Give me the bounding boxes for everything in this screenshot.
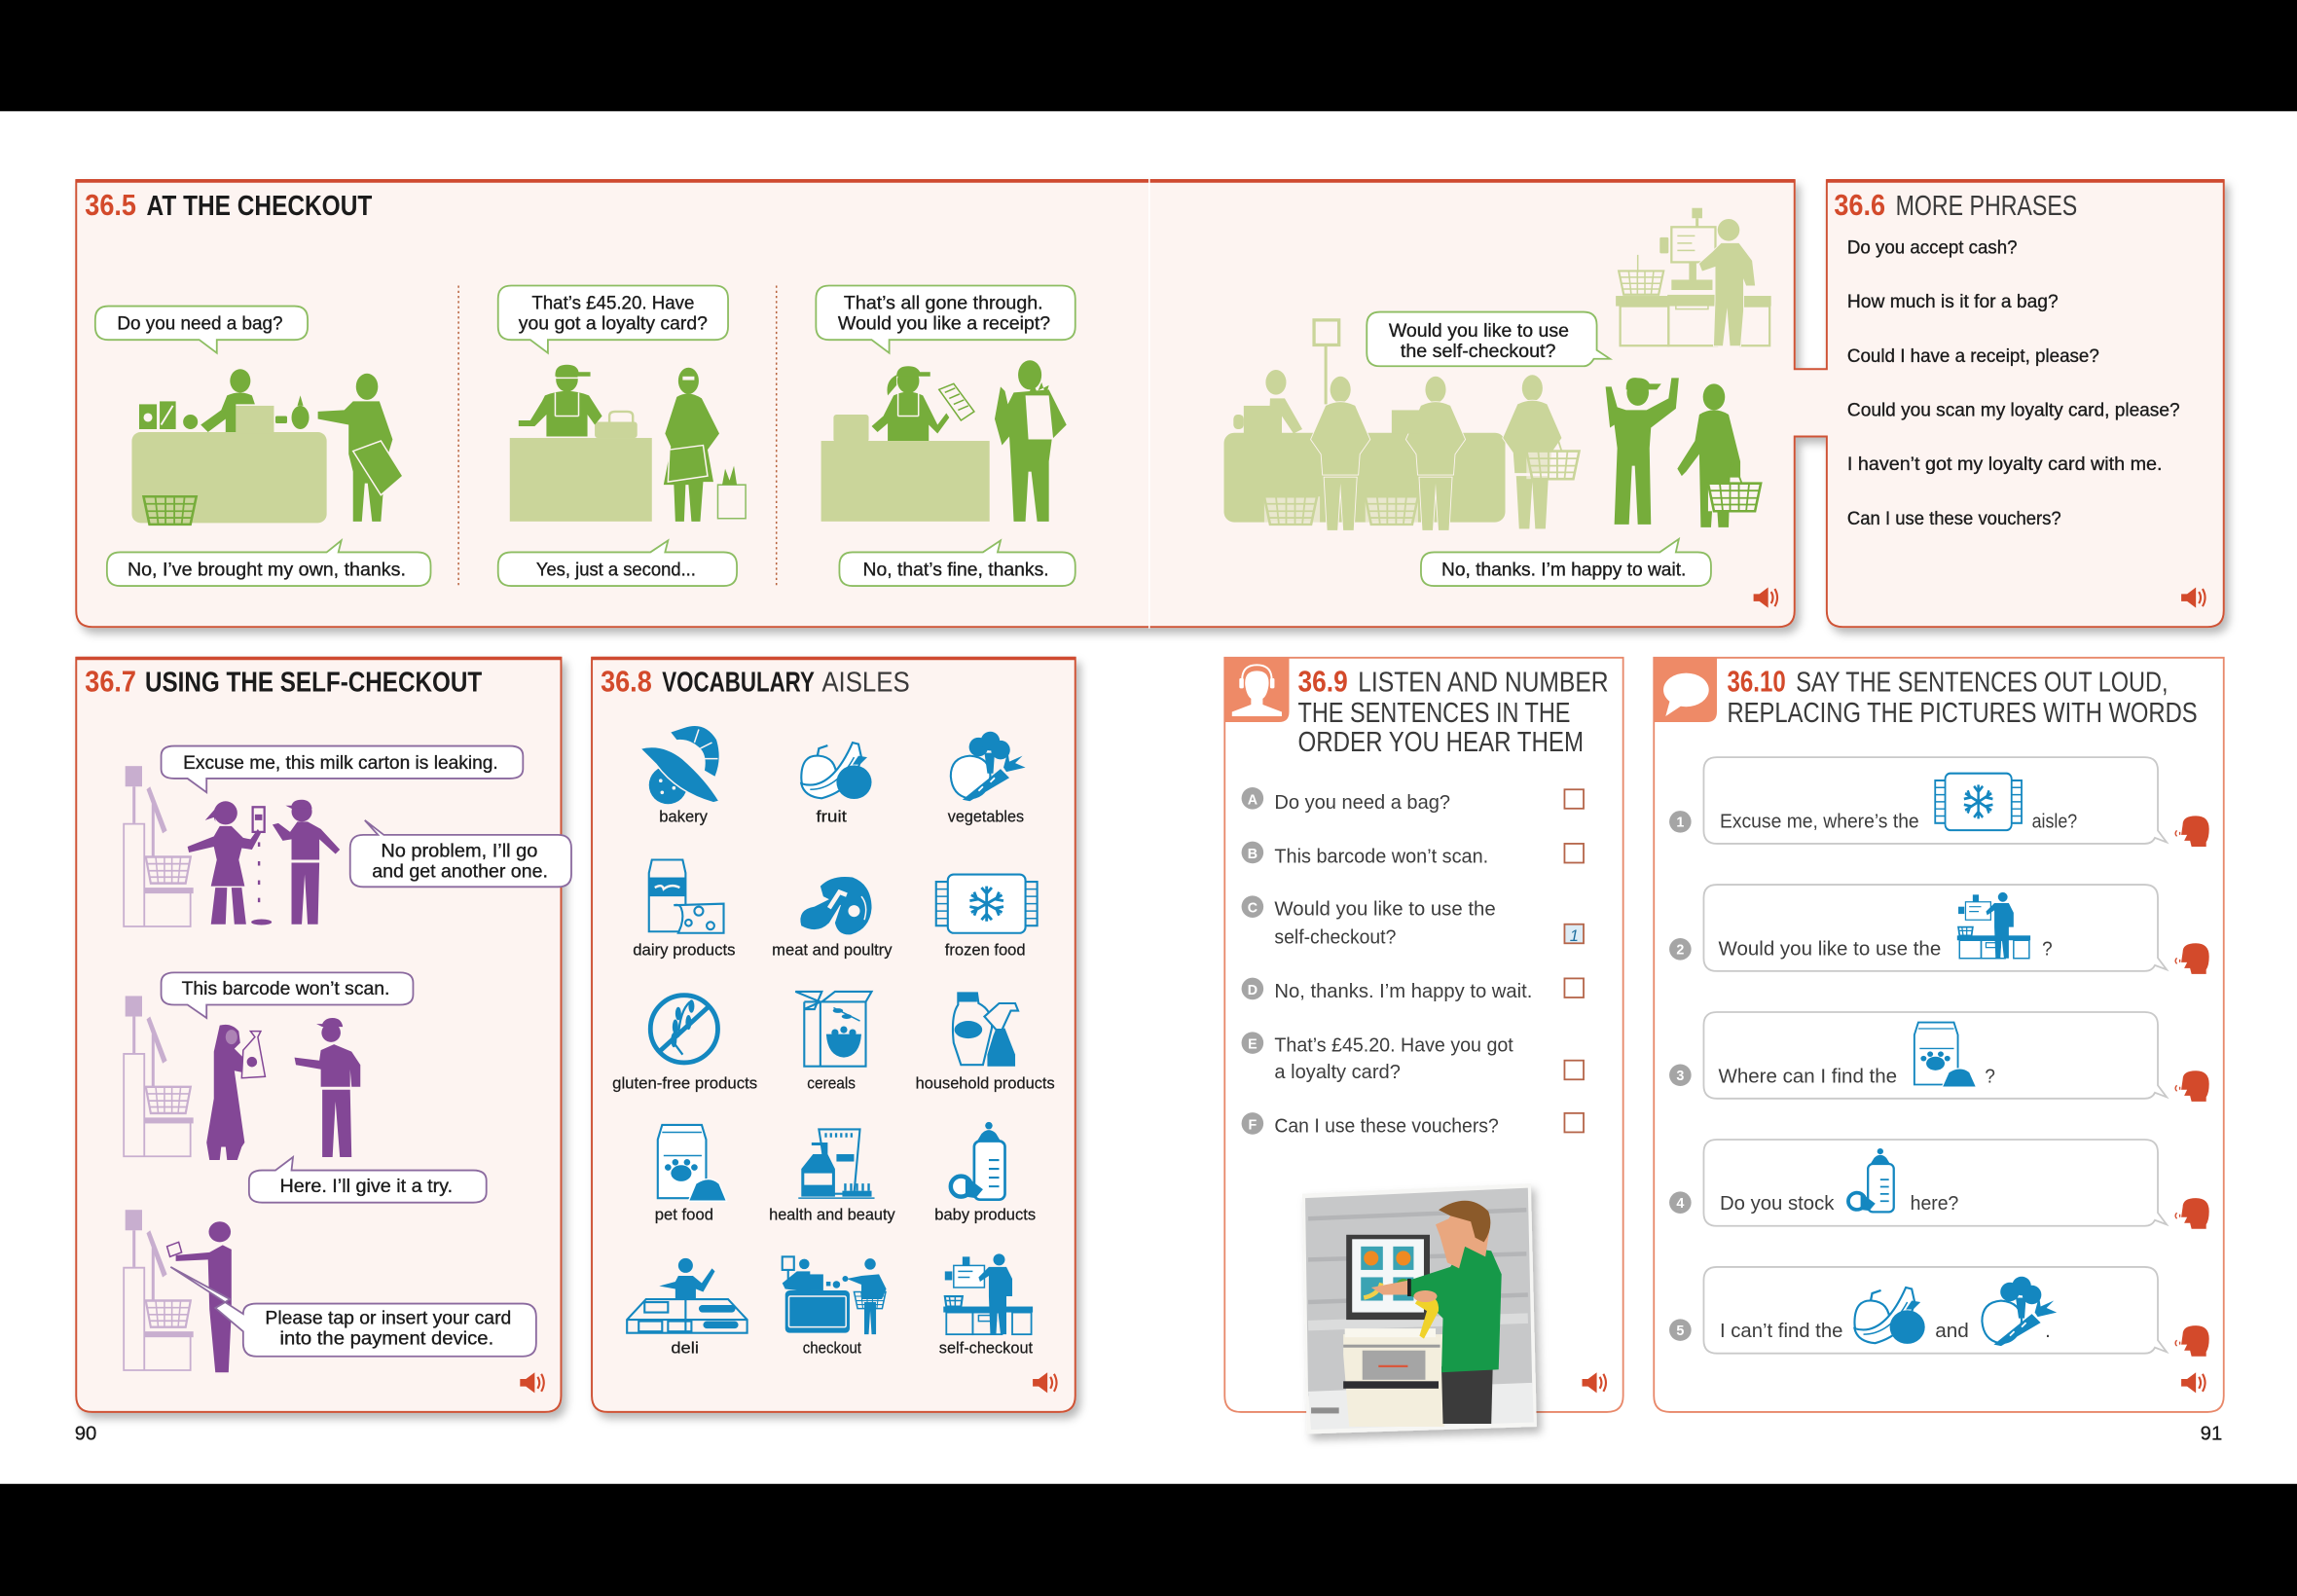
icon: audio speaker (520, 1372, 544, 1393)
top black band (0, 0, 2297, 111)
scene 2: loyalty card: That’s £45.20. Have (531, 293, 694, 314)
photo: man at self-checkout (1302, 1183, 1537, 1433)
phrase list (1847, 236, 2180, 529)
exercise row 2: 2 (1676, 943, 1684, 959)
scene 4: queue and self-checkout: No, thanks. I’m happy to wait. (1441, 560, 1686, 581)
heading 36.10: REPLACING THE PICTURES WITH WORDS (1728, 698, 2198, 729)
sentence list: No, thanks. I’m happy to wait. (1274, 981, 1532, 1002)
sentence list: That’s £45.20. Have you got (1274, 1035, 1513, 1057)
scene 4: queue and self-checkout: the self-checkout? (1401, 341, 1556, 362)
heading 36.6 (1834, 190, 2077, 222)
vocabulary: gluten-free products: gluten-free products (612, 1073, 757, 1092)
scene 3: receipt: That’s all gone through. (844, 293, 1043, 314)
vocabulary: deli (627, 1258, 747, 1358)
exercise row 4 (1669, 1140, 2209, 1229)
panel: 36.8 vocabulary aisles (592, 658, 1076, 1412)
sentence list: self-checkout? (1274, 926, 1396, 948)
phrase list: I haven’t got my loyalty card with me. (1847, 453, 2163, 475)
heading 36.8: VOCABULARY (662, 667, 815, 698)
scene 2: loyalty card: you got a loyalty card? (519, 313, 708, 335)
exercise row 4: here? (1911, 1193, 1958, 1215)
vocabulary: bakery (640, 726, 719, 825)
page number 91: 91 (2201, 1424, 2222, 1445)
panel: 36.6 more phrases (1834, 190, 2206, 608)
exercise row 1: 1 (1676, 816, 1684, 831)
sentence list: E (1248, 1037, 1258, 1053)
panel: 36.9 listen and number (1224, 658, 1623, 1433)
vocabulary: checkout: checkout (803, 1339, 861, 1358)
sentence list: D (1248, 983, 1258, 998)
vocabulary: self-checkout: self-checkout (939, 1339, 1033, 1358)
exercise row 4: Do you stock (1720, 1193, 1835, 1215)
scene 3: receipt: No, that’s fine, thanks. (863, 560, 1049, 581)
heading 36.9: THE SENTENCES IN THE (1298, 698, 1570, 729)
exercise row 1 (1669, 757, 2209, 847)
vocabulary: baby products (934, 1122, 1036, 1224)
vocabulary: dairy products: dairy products (633, 940, 736, 959)
heading 36.8: AISLES (821, 667, 910, 698)
icon: audio speaker (1033, 1372, 1057, 1393)
heading 36.5: AT THE CHECKOUT (147, 191, 373, 222)
page number 90: 90 (75, 1424, 96, 1445)
exercise row 3: ? (1985, 1066, 1995, 1087)
scene 3: receipt (816, 285, 1076, 586)
panel: 36.7 using the self-checkout (76, 658, 571, 1412)
scene: barcode won't scan (124, 972, 487, 1203)
vocabulary: cereals: cereals (807, 1073, 856, 1092)
exercise row 3: Where can I find the (1718, 1066, 1897, 1087)
phrase list: Can I use these vouchers? (1847, 508, 2061, 529)
heading 36.5: 36.5 (85, 190, 136, 222)
scene 2: loyalty card: Yes, just a second... (536, 560, 696, 581)
sentence list: C (1248, 901, 1258, 917)
exercise row 3 (1669, 1012, 2209, 1102)
heading 36.7: 36.7 (85, 666, 136, 698)
exercise row 1: Excuse me, where’s the (1720, 811, 1919, 832)
vocabulary: cereals (795, 992, 872, 1092)
phrase list: Could you scan my loyalty card, please? (1847, 399, 2180, 420)
vocabulary: gluten-free products (612, 996, 757, 1092)
vocabulary: meat and poultry (772, 877, 893, 959)
heading 36.10: 36.10 (1728, 666, 1786, 698)
sentence list: Would you like to use the (1274, 899, 1496, 921)
heading 36.6: MORE PHRASES (1896, 191, 2077, 222)
heading 36.10: SAY THE SENTENCES OUT LOUD, (1796, 667, 2169, 698)
icon: audio speaker (1583, 1372, 1606, 1393)
panel: 36.5 at the checkout (85, 190, 1777, 608)
heading 36.8 (601, 666, 910, 698)
exercise row 5: and (1935, 1321, 1969, 1342)
scene 1: do you need a bag: Do you need a bag? (117, 313, 283, 335)
sentence list: a loyalty card? (1274, 1062, 1401, 1083)
exercise row 5: I can’t find the (1720, 1321, 1842, 1342)
heading 36.8: 36.8 (601, 666, 652, 698)
sentence list: B (1248, 847, 1258, 862)
exercise row 3: 3 (1676, 1069, 1684, 1084)
divider (458, 285, 777, 586)
scene: leaking milk carton: and get another one. (372, 861, 548, 883)
exercise row 1: aisle? (2032, 811, 2077, 832)
exercise row 5: 5 (1676, 1324, 1684, 1339)
scene: leaking milk carton (124, 746, 571, 926)
vocabulary: bakery: bakery (659, 807, 709, 825)
icon: audio speaker (1754, 588, 1777, 608)
heading 36.10 (1728, 666, 2198, 729)
vocabulary: pet food: pet food (655, 1206, 713, 1224)
heading 36.7: USING THE SELF-CHECKOUT (145, 667, 483, 698)
vocabulary: health and beauty (769, 1129, 895, 1224)
scene 4: queue and self-checkout: Would you like to use (1389, 320, 1569, 342)
sentence list: Can I use these vouchers? (1274, 1115, 1499, 1137)
icon: speech bubble tab (1654, 658, 1717, 722)
vocabulary: dairy products (633, 859, 736, 959)
scene 2: loyalty card (498, 285, 746, 586)
self-checkout kiosk in background (1616, 208, 1771, 345)
icon: audio speaker (2181, 588, 2206, 608)
exercise row 4: 4 (1676, 1196, 1684, 1212)
vocabulary: deli: deli (671, 1339, 699, 1358)
scene 3: receipt: Would you like a receipt? (838, 313, 1050, 335)
phrase list: Could I have a receipt, please? (1847, 345, 2099, 367)
vocabulary: vegetables (948, 732, 1026, 825)
vocabulary: fruit: fruit (816, 807, 847, 825)
vocabulary: baby products: baby products (934, 1206, 1036, 1224)
vocabulary: frozen food (936, 875, 1038, 959)
vocabulary: household products (916, 993, 1055, 1092)
vocabulary: pet food (655, 1125, 727, 1224)
vocabulary: household products: household products (916, 1073, 1055, 1092)
sentence list: This barcode won’t scan. (1274, 847, 1488, 868)
icon: audio speaker (2181, 1372, 2206, 1393)
scene: leaking milk carton: Excuse me, this milk carton is leaking. (183, 752, 498, 774)
sentence list: F (1248, 1117, 1257, 1133)
sentence list: 1 (1570, 926, 1579, 945)
exercise row 5: . (2045, 1321, 2051, 1342)
scene: barcode won't scan: This barcode won’t scan. (182, 978, 389, 999)
heading 36.9: LISTEN AND NUMBER (1358, 667, 1609, 698)
scene: leaking milk carton: No problem, I’ll go (381, 840, 538, 861)
sentence list: A (1248, 792, 1258, 808)
heading 36.9: 36.9 (1298, 666, 1348, 698)
vocabulary: frozen food: frozen food (945, 940, 1026, 959)
sentence list (1242, 787, 1584, 1137)
vocabulary: self-checkout (939, 1253, 1033, 1358)
scene: tap payment card (124, 1210, 536, 1372)
exercise row 2: ? (2042, 938, 2053, 960)
panel: 36.10 say the sentences (1654, 658, 2224, 1412)
exercise row 5 (1669, 1267, 2209, 1357)
exercise row 2: Would you like to use the (1718, 938, 1941, 960)
bottom black band (0, 1484, 2297, 1596)
scene: tap payment card: into the payment device. (279, 1328, 493, 1350)
phrase list: How much is it for a bag? (1847, 291, 2059, 312)
scene 1: do you need a bag (95, 307, 431, 586)
vocabulary: health and beauty: health and beauty (769, 1206, 895, 1224)
vocabulary: fruit (801, 743, 872, 825)
heading 36.9: ORDER YOU HEAR THEM (1298, 727, 1584, 758)
vocabulary: meat and poultry: meat and poultry (772, 940, 893, 959)
vocabulary: vegetables: vegetables (948, 807, 1024, 825)
icon: listening head tab (1224, 658, 1289, 722)
heading 36.5 (85, 190, 373, 222)
phrase list: Do you accept cash? (1847, 236, 2018, 258)
scene 4: queue and self-checkout (1224, 208, 1771, 586)
scene: barcode won't scan: Here. I’ll give it a try. (279, 1176, 453, 1197)
panels 36.5 and 36.6 joined background (76, 179, 2224, 629)
heading 36.6: 36.6 (1834, 190, 1885, 222)
sentence list: Do you need a bag? (1274, 792, 1450, 814)
vocabulary: checkout (783, 1256, 887, 1358)
exercise row 2 (1669, 885, 2209, 974)
heading 36.9 (1298, 666, 1609, 758)
scene: tap payment card: Please tap or insert your card (265, 1308, 511, 1329)
scene 1: do you need a bag: No, I’ve brought my own, thanks. (128, 560, 406, 581)
